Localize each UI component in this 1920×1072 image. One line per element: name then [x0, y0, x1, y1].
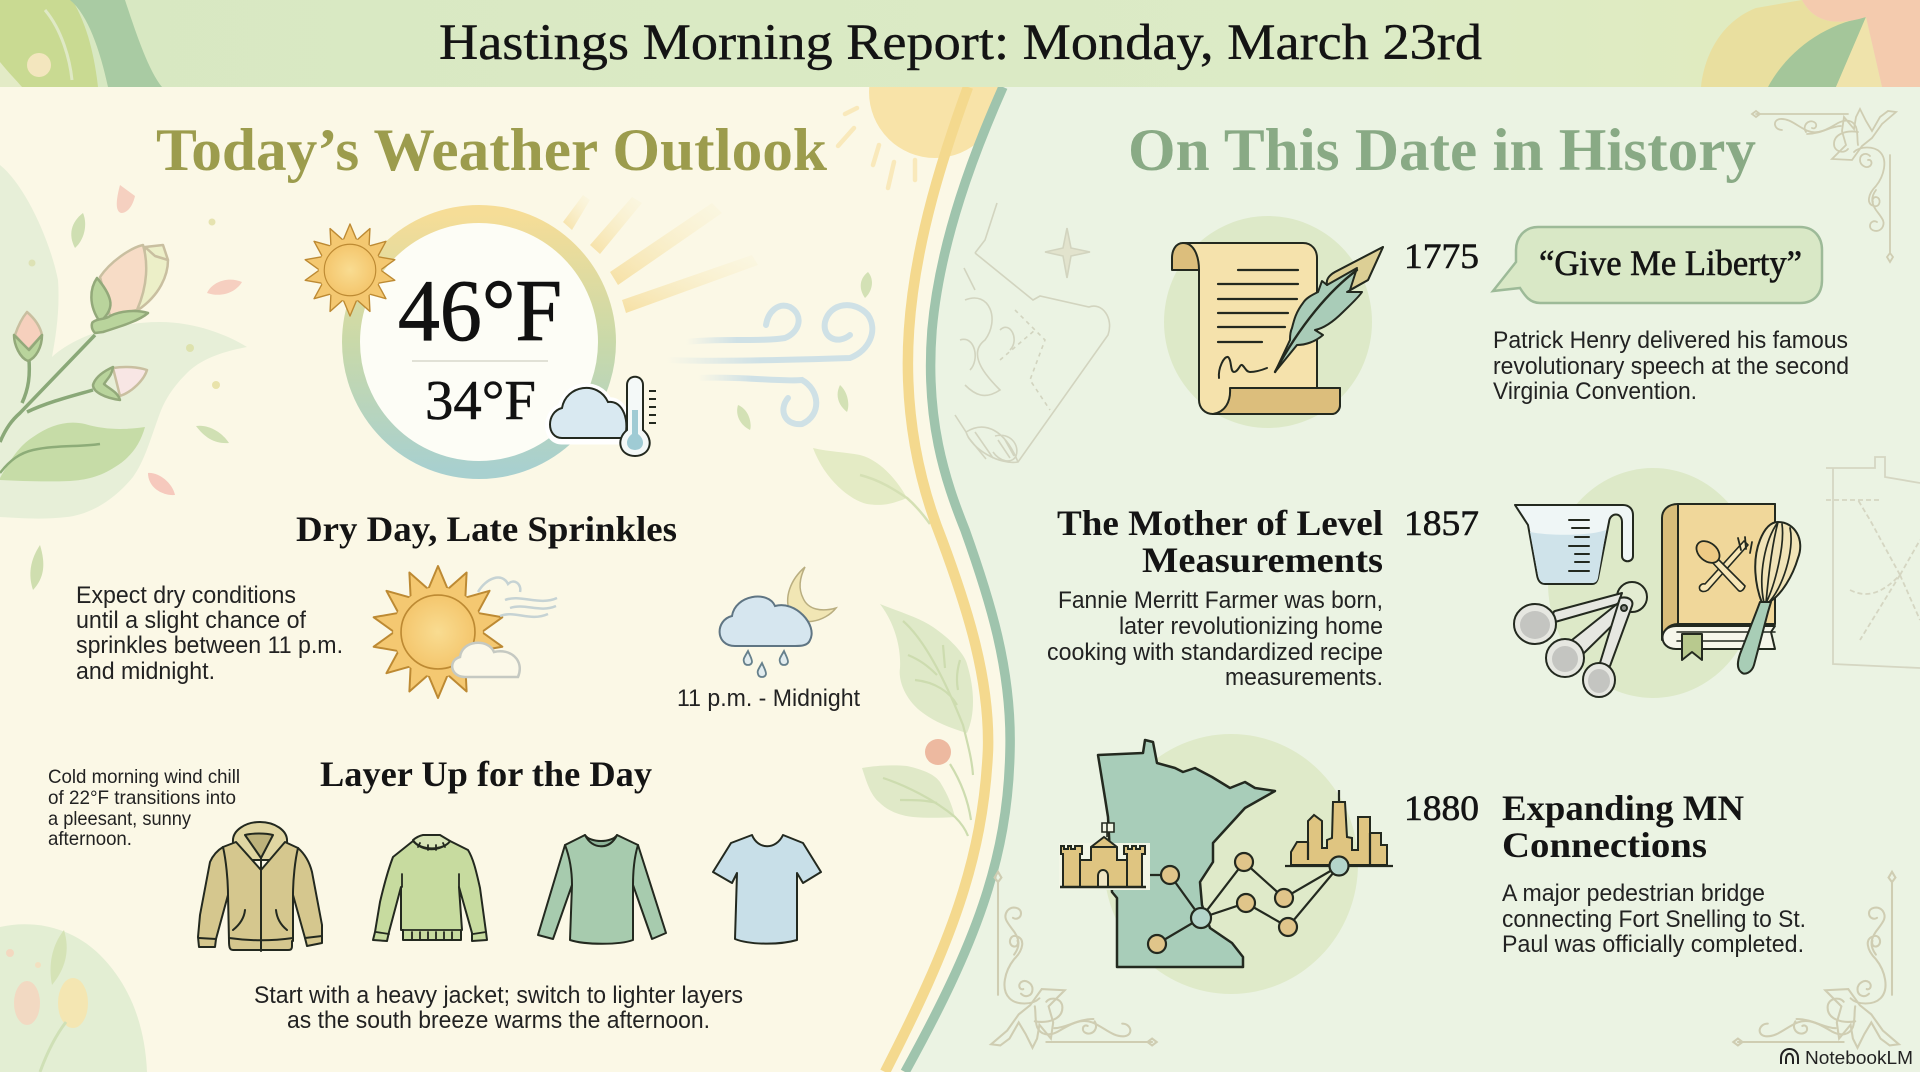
text: description: Virginia Convention.: [1493, 378, 1697, 405]
text: description: A major pedestrian bridge: [1502, 880, 1765, 907]
text: description: later revolutionizing home: [1119, 613, 1383, 640]
decoration: antique map sketch right: [1826, 457, 1920, 668]
divider: yellow and teal ribbon: [885, 87, 1010, 1072]
icon: small sun: [304, 224, 396, 316]
text: wind chill: afternoon.: [48, 828, 132, 850]
subheading: layer up: Layer Up for the Day: [320, 754, 652, 794]
decoration: antique map sketch upper left: [955, 203, 1110, 462]
icon: large bud: [91, 245, 168, 333]
icon: rain cloud and moon: [720, 567, 836, 677]
icon: jacket: [198, 822, 322, 951]
text: forecast: Expect dry conditions: [76, 582, 296, 609]
icon: measuring cup: [1515, 505, 1633, 584]
subheading: dry day: Dry Day, Late Sprinkles: [296, 509, 677, 549]
watermark: NotebookLM: NotebookLM: [1805, 1048, 1913, 1068]
text: description: Paul was officially completed.: [1502, 931, 1804, 958]
text: layering advice: as the south breeze warms the afternoon.: [287, 1007, 710, 1034]
network nodes: [1148, 853, 1348, 953]
heading: Connections: [1502, 825, 1707, 865]
icon: wind swirls: [667, 305, 872, 424]
callout: speech bubble: [1493, 227, 1822, 303]
header band: [0, 0, 1920, 87]
heading: Expanding MN: [1502, 788, 1744, 828]
icon: castle: [1058, 818, 1150, 890]
event 1880: [1058, 734, 1806, 994]
text: layering advice: Start with a heavy jacket; switch to lighter layers: [254, 982, 743, 1009]
icon: scroll and quill: [1172, 243, 1383, 414]
heading: history: On This Date in History: [1128, 117, 1756, 183]
year: 1880: [1404, 788, 1479, 828]
text: wind chill: Cold morning wind chill: [48, 766, 240, 788]
year: 1775: [1404, 236, 1479, 276]
icon: Minnesota map: [1098, 740, 1275, 967]
low temperature: 34°F: [425, 370, 536, 432]
heading: [1502, 788, 1744, 865]
text: description: connecting Fort Snelling to St.: [1502, 906, 1806, 933]
decoration: sun rays from temperature ring: [563, 195, 758, 313]
text: description: Patrick Henry delivered his famous: [1493, 327, 1848, 354]
decoration: corner ornaments: [991, 109, 1899, 1048]
text: wind chill: of 22°F transitions into: [48, 787, 236, 809]
text: wind chill: [48, 766, 240, 850]
heading: weather: Today’s Weather Outlook: [156, 117, 828, 183]
decoration: leaves and berry beside the divider: [737, 272, 973, 836]
event 1857: [1047, 468, 1800, 698]
icon: city skyline: [1285, 790, 1393, 866]
panel: history background: [905, 87, 1920, 1072]
icon: cookbook with spoon, fork and whisk: [1662, 504, 1800, 674]
event 1775: [1164, 216, 1849, 428]
text: forecast: until a slight chance of: [76, 607, 306, 634]
text: layering advice: [254, 982, 743, 1034]
decoration: pale sun and rays behind divider: [838, 26, 1001, 188]
decoration: soft left foliage: [0, 165, 247, 1072]
label: rain time: 11 p.m. - Midnight: [677, 685, 860, 712]
title: Hastings Morning Report: Monday, March 23rd: [439, 15, 1482, 71]
text: description: [1047, 587, 1383, 691]
text: description: [1493, 327, 1849, 405]
icon: left bud: [14, 312, 42, 361]
decoration: header right flower: [1701, 0, 1920, 87]
high temperature: 46°F: [398, 263, 562, 360]
decoration: scattered petals, leaves and dots: [28, 185, 242, 590]
text: description: Fannie Merritt Farmer was born,: [1058, 587, 1383, 614]
text: forecast: sprinkles between 11 p.m.: [76, 632, 343, 659]
icon: long sleeve shirt: [538, 835, 666, 944]
icon: measuring spoons: [1514, 582, 1647, 697]
icon: sweater: [373, 835, 487, 941]
heading: [1057, 503, 1383, 580]
callout: speech bubble: “Give Me Liberty”: [1539, 243, 1802, 283]
icon: large sun with cloud: [371, 566, 557, 698]
icon: small bud: [93, 367, 147, 400]
temperature gauge: [304, 214, 656, 470]
decoration: bottom-left flower cluster: [0, 924, 147, 1072]
text: description: revolutionary speech at the second: [1493, 353, 1849, 380]
heading: The Mother of Level: [1057, 503, 1383, 543]
decoration: header left foliage: [0, 0, 162, 87]
network lines: [1148, 862, 1339, 944]
icon: t-shirt: [713, 835, 821, 944]
decoration: flowering branch: [0, 245, 168, 481]
text: forecast: and midnight.: [76, 658, 215, 685]
heading: Measurements: [1142, 540, 1383, 580]
year: 1857: [1404, 503, 1479, 543]
text: forecast: [76, 582, 343, 685]
text: description: [1502, 880, 1806, 958]
icon: cloud and thermometer: [550, 377, 656, 456]
text: wind chill: a pleesant, sunny: [48, 808, 191, 830]
text: description: cooking with standardized recipe: [1047, 639, 1383, 666]
text: description: measurements.: [1225, 664, 1383, 691]
